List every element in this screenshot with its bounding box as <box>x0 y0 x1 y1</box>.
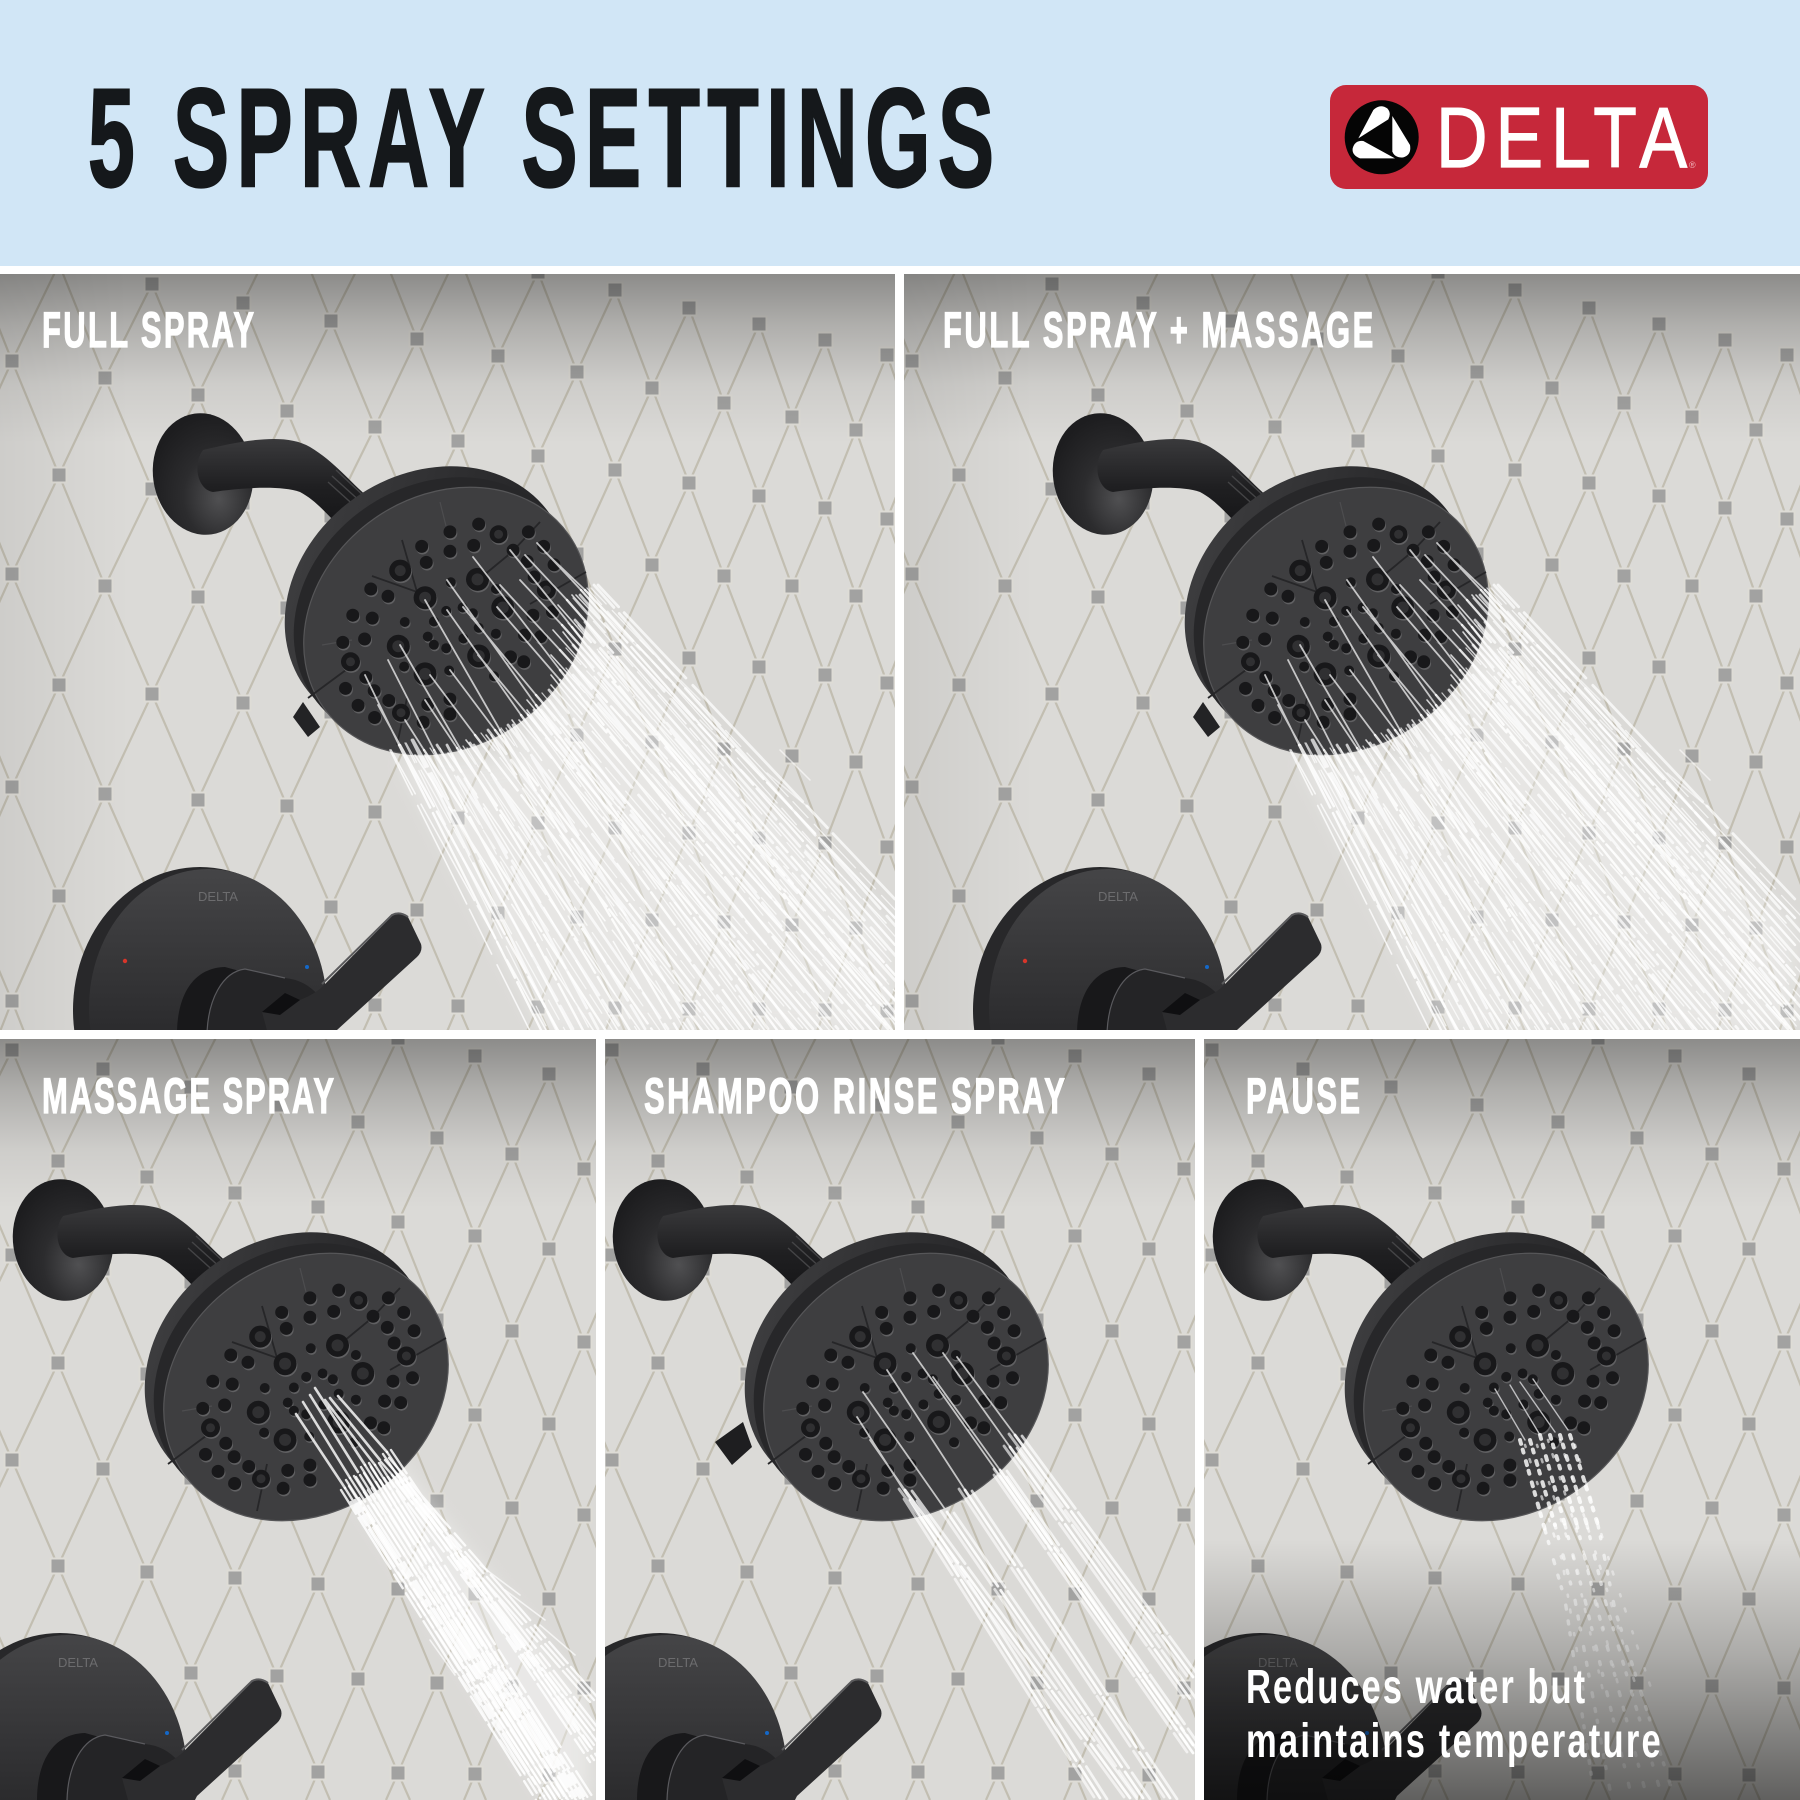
tile wall <box>0 979 778 1800</box>
shower head and arm <box>1205 1173 1701 1575</box>
bottom gradient <box>1204 1540 1800 1800</box>
water glow <box>400 640 895 1034</box>
valve trim and handle <box>973 867 1322 1034</box>
icon: lever nub <box>715 1422 752 1465</box>
logo: Delta <box>1330 85 1708 189</box>
callout text: Reduces water but <box>1246 1659 1585 1713</box>
shower head and arm <box>145 407 641 809</box>
panel: full spray + massage <box>904 274 1800 1030</box>
heading: PAUSE <box>1246 1067 1360 1124</box>
water spray <box>365 543 908 1039</box>
icon: lever nub <box>1193 702 1220 737</box>
valve trim and handle <box>1133 1633 1482 1800</box>
callout text: maintains temperature <box>1246 1713 1661 1767</box>
panel: shampoo rinse spray <box>605 1039 1195 1800</box>
water glow <box>1300 640 1795 1034</box>
panel: massage spray <box>0 1039 596 1800</box>
water glow <box>360 1460 590 1798</box>
water: droplets <box>1495 1379 1672 1790</box>
shower head and arm <box>1045 407 1541 809</box>
heading: MASSAGE SPRAY <box>42 1067 334 1124</box>
valve trim and handle <box>0 1633 282 1800</box>
tile wall <box>0 213 918 1034</box>
tile wall <box>866 213 1800 1034</box>
panel: full spray <box>0 274 895 1030</box>
valve trim and handle <box>73 867 422 1034</box>
heading: FULL SPRAY <box>42 301 254 358</box>
logo: Delta: ® <box>1689 160 1696 170</box>
water spray <box>1265 543 1800 1039</box>
header banner <box>0 0 1800 266</box>
tile wall <box>1026 979 1800 1800</box>
heading: SHAMPOO RINSE SPRAY <box>644 1067 1065 1124</box>
title: 5 SPRAY SETTINGS <box>88 60 994 216</box>
shower head and arm <box>5 1173 501 1575</box>
water spray: rinse streams <box>857 1353 1200 1799</box>
logo: Delta: DELTA <box>1436 90 1688 185</box>
callout text <box>1246 1659 1661 1767</box>
valve trim and handle <box>533 1633 882 1800</box>
panel: pause <box>1204 1039 1800 1800</box>
tile wall <box>426 979 1378 1800</box>
heading: FULL SPRAY + MASSAGE <box>943 301 1373 358</box>
shower head and arm <box>605 1173 1101 1575</box>
water spray: massage jet <box>296 1388 598 1800</box>
icon: lever nub <box>293 702 320 737</box>
